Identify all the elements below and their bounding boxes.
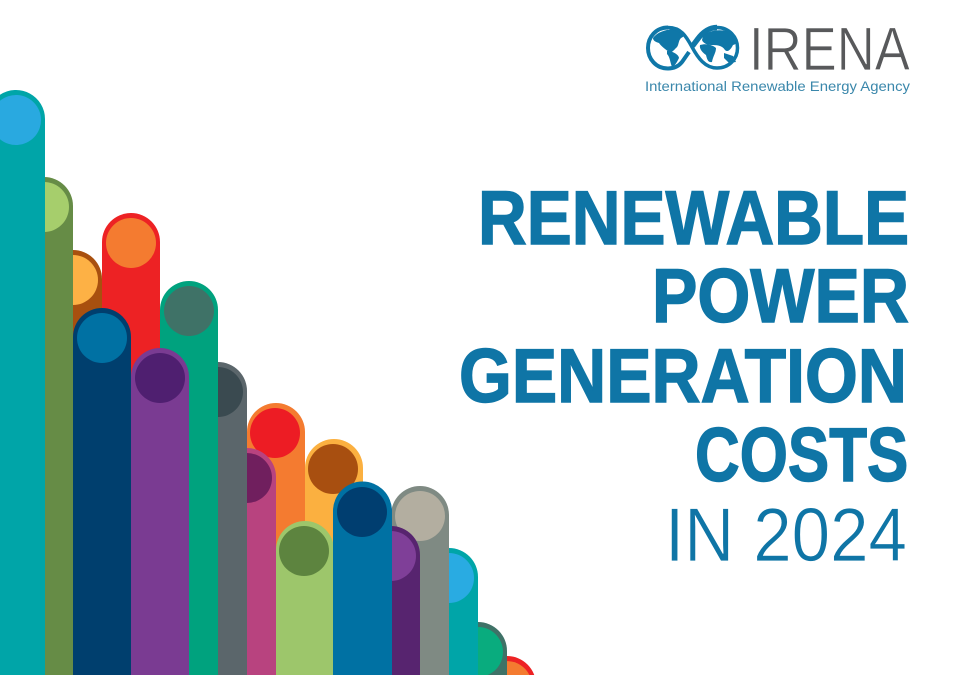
bar 16: teal (420, 548, 478, 675)
title line 1: RENEWABLE (478, 176, 909, 261)
icon: infinity globes (648, 28, 738, 68)
bar 13: blue (333, 482, 392, 675)
bar 3: brown (44, 250, 102, 675)
infinity lower left swash (648, 28, 689, 68)
bar 4: red (102, 213, 160, 675)
bar 6: navy (73, 308, 131, 675)
IRENA logo (645, 15, 910, 94)
wordmark: IRENA (749, 15, 910, 84)
infinity strand over crossing (692, 28, 717, 46)
agency name: International Renewable Energy Agency (645, 78, 910, 94)
bar 1: teal (0, 90, 45, 675)
bar 2: olive (15, 177, 73, 675)
bar 9: orange (247, 403, 305, 675)
bar 14: grey (391, 486, 449, 675)
infinity strand under crossing (668, 28, 738, 68)
left globe landmasses (653, 29, 684, 67)
bar 10: yellow (305, 439, 363, 675)
bar 5: green (160, 281, 218, 675)
bar 17: dark green (449, 622, 507, 675)
bar 11: pink (218, 448, 276, 675)
bar 18: red and orange (478, 656, 536, 675)
bar 8: slate grey (189, 362, 247, 675)
title line 3: GENERATION (459, 335, 907, 419)
bar 15: dark purple (362, 526, 420, 675)
title line 4: COSTS (695, 412, 908, 497)
bar 12: light green (276, 521, 334, 675)
right globe landmasses (700, 30, 737, 63)
title line 2: POWER (652, 255, 909, 339)
title line 5: IN 2024 (665, 493, 907, 578)
pipe chart: descending coloured bars (0, 90, 536, 675)
bar 7: purple (131, 348, 189, 675)
title (459, 176, 909, 578)
